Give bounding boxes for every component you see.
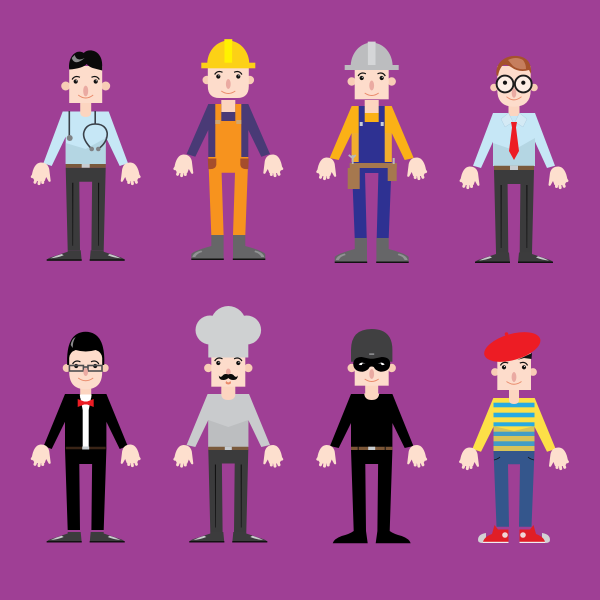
character: doctor xyxy=(32,50,140,261)
sneakers xyxy=(478,525,550,543)
character: masked thief xyxy=(317,329,426,543)
character: man in tuxedo xyxy=(32,332,140,542)
striped shirt bands xyxy=(494,403,534,446)
character: chef xyxy=(174,306,282,542)
character: construction worker in orange overalls xyxy=(174,39,282,260)
character: builder in blue overalls xyxy=(317,42,426,263)
character: office worker with glasses and tie xyxy=(460,56,568,263)
character: French painter with beret xyxy=(460,327,568,543)
tool belt xyxy=(348,155,397,189)
